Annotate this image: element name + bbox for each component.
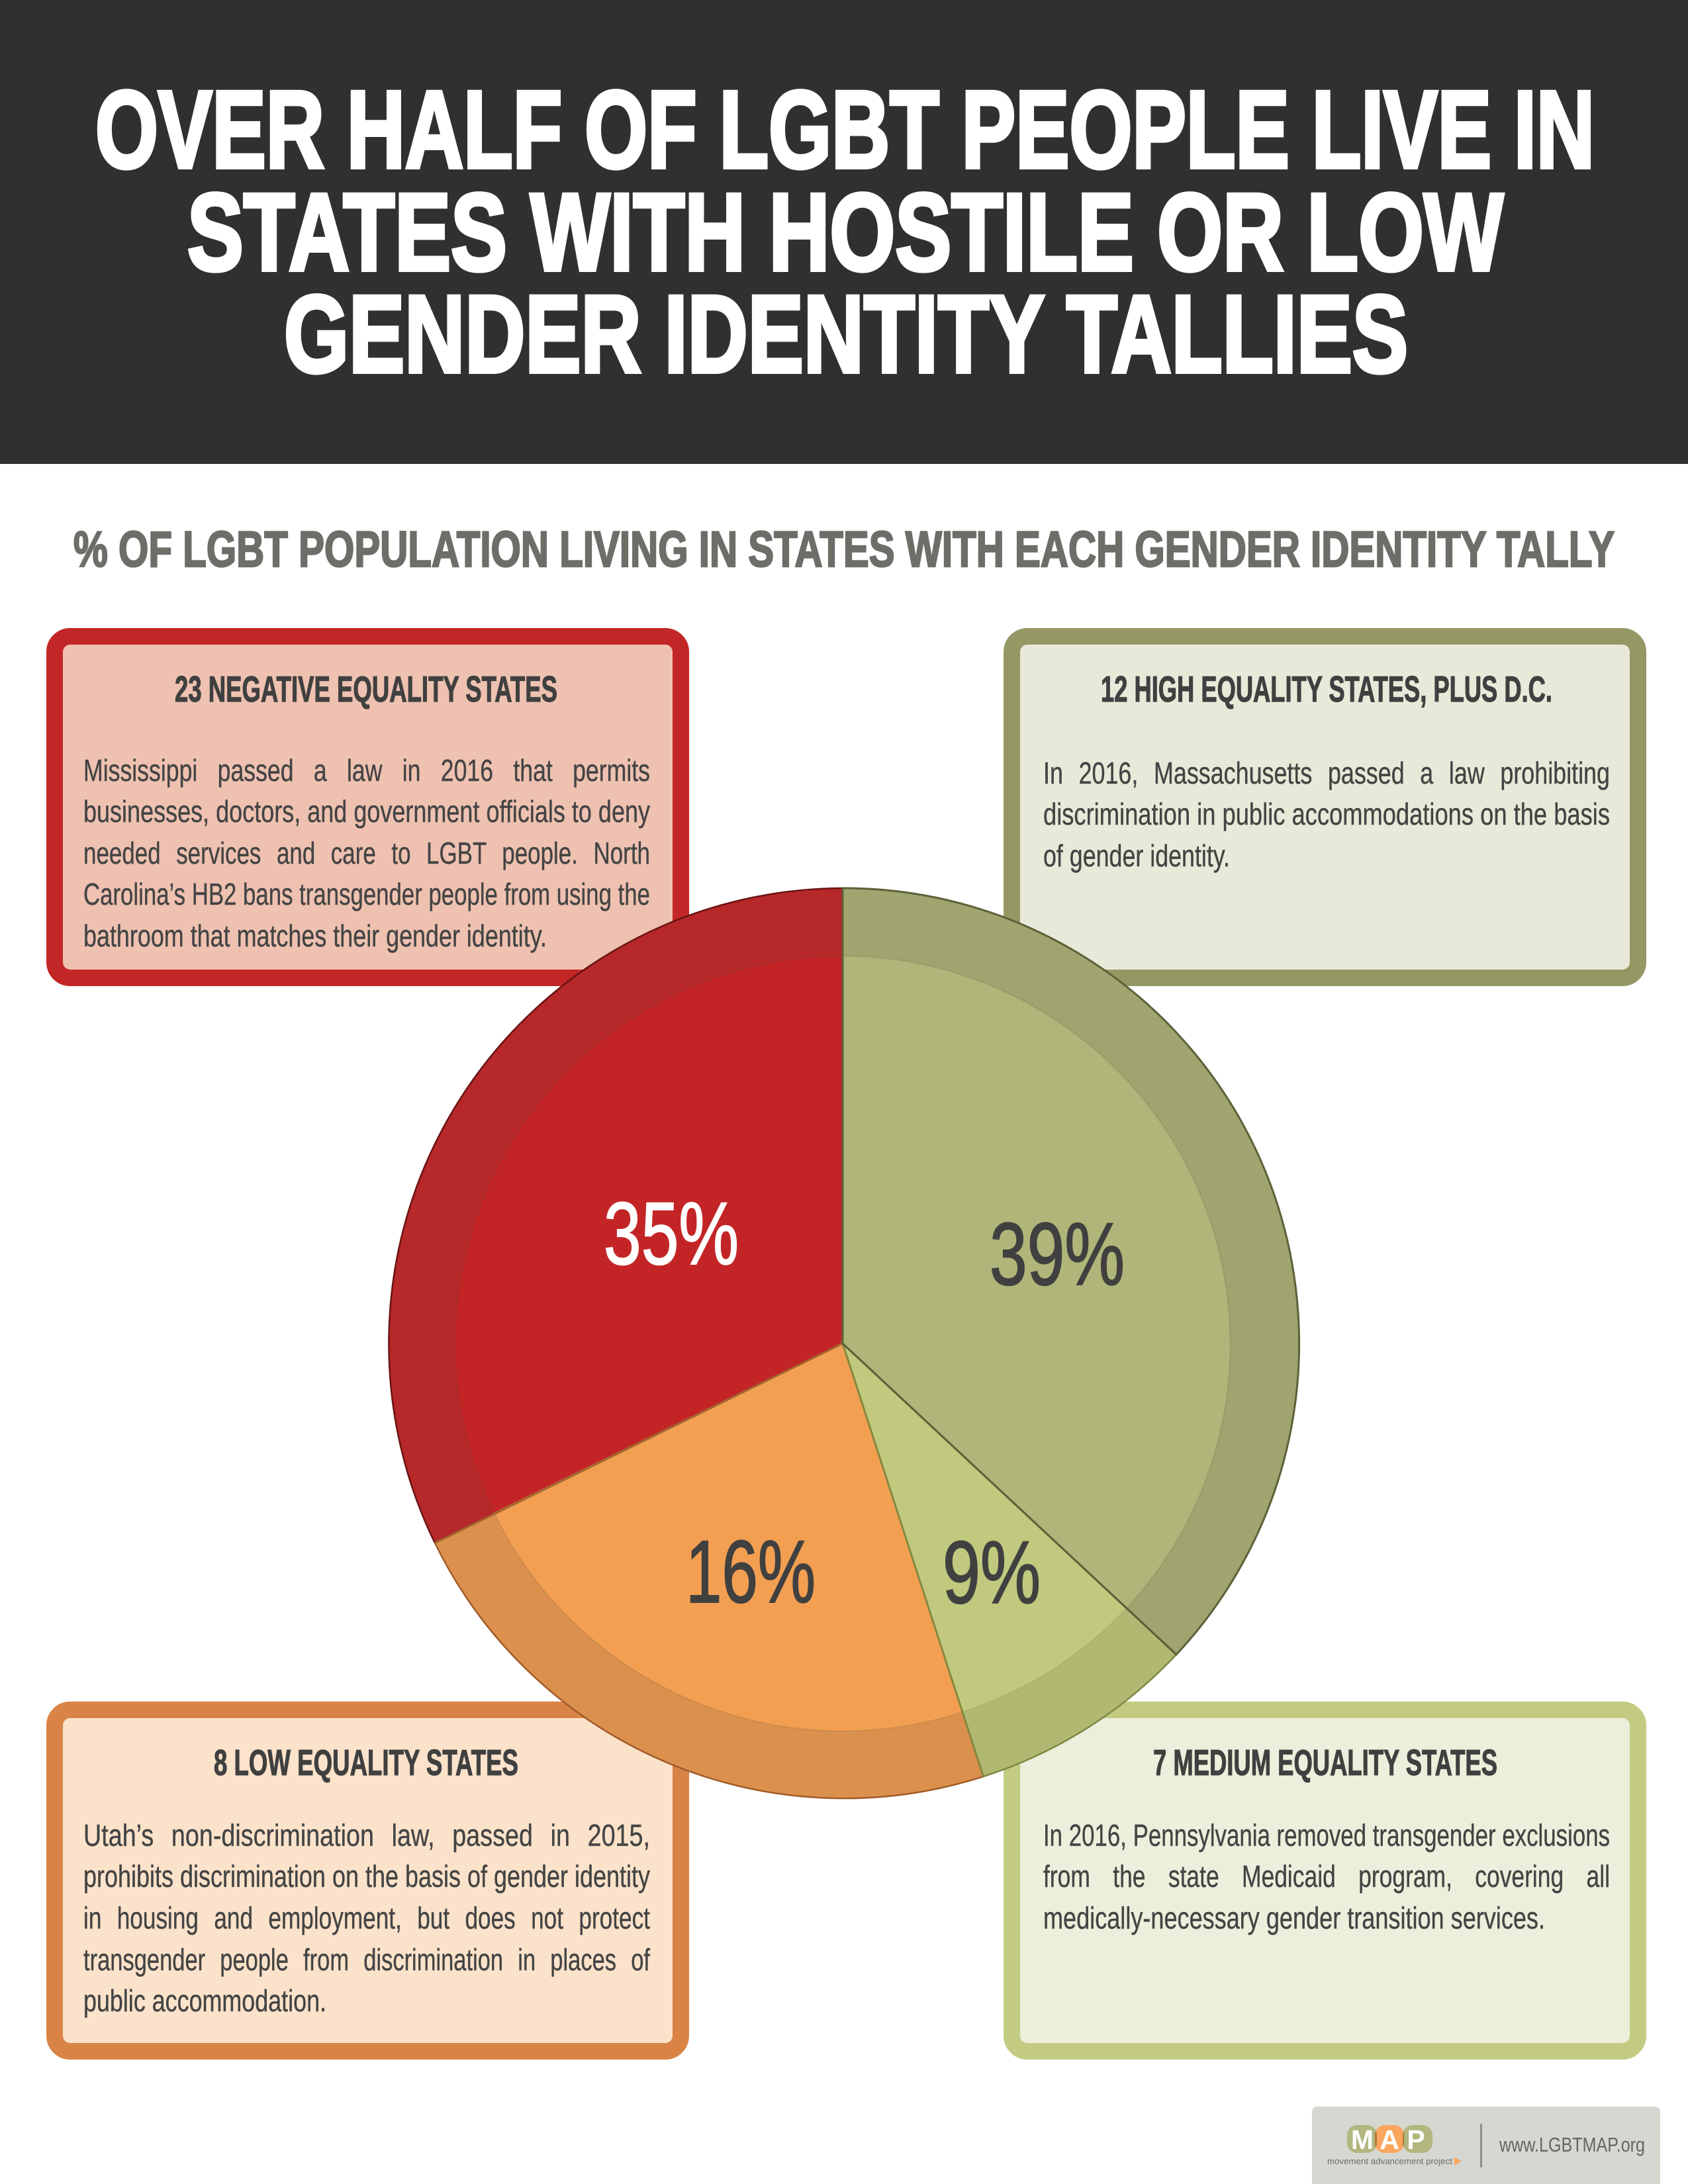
text block: low equality [83, 1818, 650, 2018]
text block: low equality: in housing and employment, but does not protect [83, 1901, 650, 1935]
icon: MAP logo: A [1380, 2124, 1399, 2155]
text block: negative equality: needed services and care to LGBT people. North [83, 836, 650, 870]
text block: high equality [1043, 756, 1610, 873]
heading: low equality: 8 LOW EQUALITY STATES [214, 1742, 518, 1783]
text block: negative equality [83, 753, 650, 953]
label: 39%: 39% [990, 1205, 1125, 1304]
website url: www.LGBTMAP.org [1499, 2133, 1645, 2156]
text block: medium equality: medically-necessary gender transition services. [1043, 1901, 1545, 1935]
footer logo box [1312, 2107, 1660, 2184]
label: 9%: 9% [943, 1524, 1041, 1622]
text block: negative equality: Carolina’s HB2 bans transgender people from using the [83, 877, 650, 911]
icon: MAP logo: M [1351, 2124, 1374, 2155]
text block: negative equality: bathroom that matches their gender identity. [83, 919, 547, 953]
heading: medium equality: 7 MEDIUM EQUALITY STATES [1153, 1742, 1497, 1783]
slice: medium 9% [843, 1343, 1176, 1776]
label: 16%: 16% [686, 1523, 816, 1621]
slice: high 39% [843, 888, 1299, 1655]
text block: low equality: transgender people from discrimination in places of [83, 1942, 650, 1977]
header banner with title [0, 0, 1688, 464]
icon: orange arrow [1454, 2157, 1462, 2165]
text block: negative equality: businesses, doctors, and government officials to deny [83, 794, 650, 829]
panel: low equality states [46, 1702, 689, 2060]
text block: high equality: of gender identity. [1043, 839, 1230, 873]
text block: negative equality: Mississippi passed a law in 2016 that permits [83, 753, 650, 788]
slice: low 16% [435, 1343, 984, 1798]
pie chart [388, 887, 1300, 1799]
text block: high equality: In 2016, Massachusetts passed a law prohibiting [1043, 756, 1610, 790]
title [95, 69, 1595, 396]
text block: medium equality [1043, 1818, 1610, 1935]
heading: negative equality: 23 NEGATIVE EQUALITY STATES [175, 668, 557, 709]
panel: high equality states [1004, 628, 1646, 986]
text block: medium equality: from the state Medicaid program, covering all [1043, 1859, 1610, 1893]
panel: medium equality states [1004, 1702, 1646, 2060]
text block: low equality: prohibits discrimination on the basis of gender identity [83, 1859, 650, 1893]
panel: negative equality states [46, 628, 689, 986]
slice: negative 35% [389, 888, 843, 1543]
label: 35%: 35% [604, 1185, 739, 1283]
text block: low equality: public accommodation. [83, 1983, 326, 2018]
text block: low equality: Utah’s non-discrimination law, passed in 2015, [83, 1818, 650, 1852]
icon: MAP logo [1347, 2124, 1432, 2155]
organisation name: movement advancement project [1327, 2156, 1452, 2166]
icon: MAP logo: P [1407, 2124, 1425, 2155]
